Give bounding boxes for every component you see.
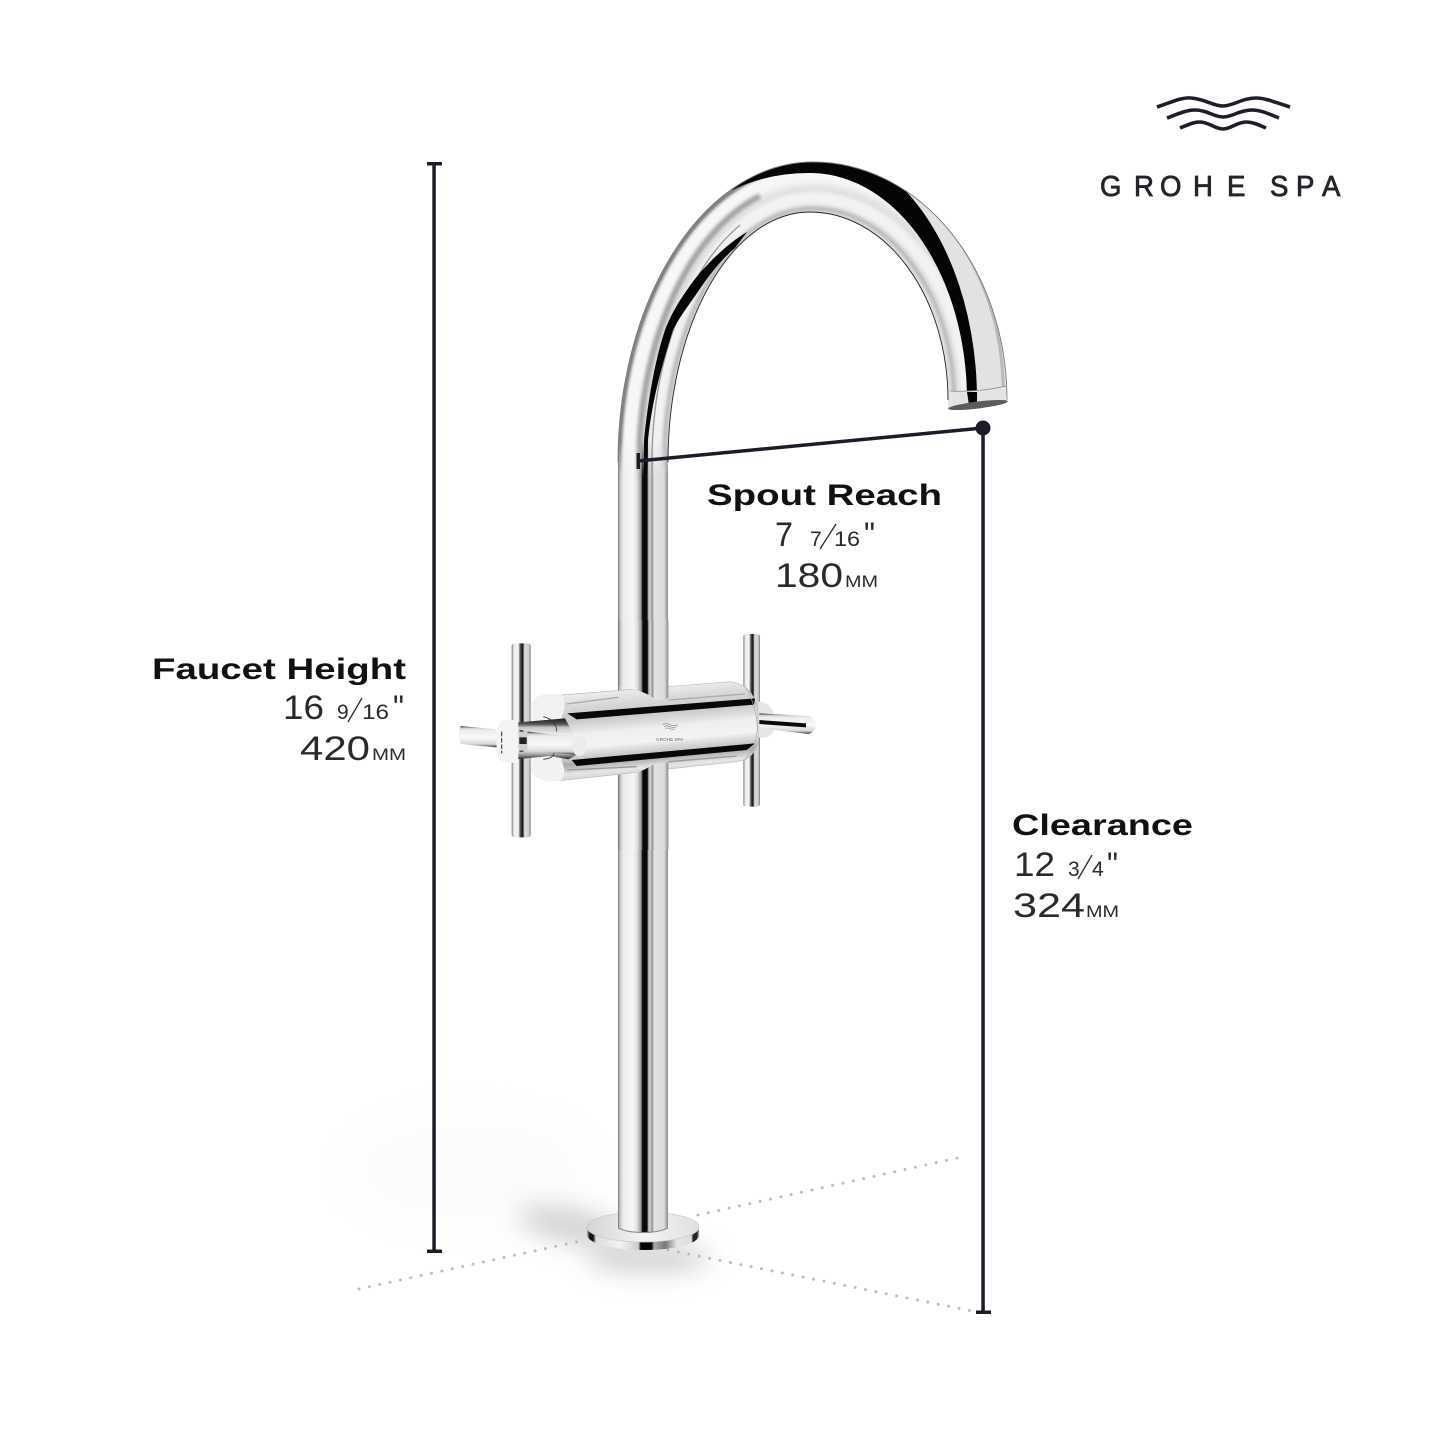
strip line (652, 225, 740, 482)
column collar seam (618, 639, 668, 642)
right vertical handle (743, 634, 760, 807)
body logo: GROHE SPA (656, 737, 684, 742)
label: spout reach: 7 (810, 528, 822, 551)
outer edge shade (618, 179, 762, 474)
label: clearance: 3 (1068, 858, 1080, 881)
label: spout reach: " (864, 516, 875, 554)
right horizontal handle (759, 713, 816, 734)
left body cap (531, 694, 564, 782)
spout outline (668, 212, 948, 462)
label: spout reach: Spout Reach (707, 479, 942, 512)
mixer body (560, 682, 758, 781)
logo: waves (1157, 98, 1290, 129)
label: clearance: Clearance (1012, 809, 1193, 842)
faucet base (587, 1200, 699, 1250)
shaft ring (543, 717, 557, 759)
body end ring (745, 687, 757, 760)
body logo (656, 724, 684, 742)
lower column (618, 770, 668, 1220)
lower hub shaft (515, 751, 577, 759)
logo: wordmark: GROHE SPA (1100, 169, 1341, 202)
tube highlight (622, 173, 906, 464)
shade next to band (639, 196, 760, 482)
label: clearance: " (1107, 846, 1118, 884)
body dark bands (567, 698, 755, 719)
left hub (496, 720, 518, 763)
right hub (758, 702, 773, 738)
upper column joint (618, 620, 668, 700)
label: faucet height: 16 (362, 701, 389, 724)
label: faucet height: " (393, 689, 404, 727)
left vertical handle (512, 643, 531, 837)
label: clearance: 4 (1092, 858, 1104, 881)
upper hub shaft (515, 718, 574, 735)
label: clearance (1012, 809, 1193, 925)
upper column (618, 478, 668, 695)
label: clearance: 12 (1014, 846, 1055, 884)
label: spout reach: MM (845, 572, 878, 591)
left horizontal handle (459, 726, 497, 747)
dotted floor lines (359, 1157, 977, 1312)
aerator tip (948, 386, 1007, 410)
hub neck (517, 732, 528, 751)
label: spout reach: 16 (834, 528, 860, 551)
label: faucet height: Faucet Height (152, 653, 406, 686)
column blend (618, 440, 668, 478)
label: clearance: MM (1086, 902, 1119, 921)
front knob (527, 732, 587, 756)
spout arc (618, 150, 1010, 482)
label: faucet height: 16 (283, 689, 324, 727)
right light strip (909, 194, 1006, 390)
label: spout reach: 180 (775, 557, 843, 595)
infographic canvas (154, 96, 1341, 1314)
floor shadow (350, 1120, 710, 1272)
spout reach and clearance measure lines (636, 420, 991, 1314)
hub neck dark (519, 737, 527, 744)
label: faucet height: MM (372, 745, 406, 764)
label: faucet height: 420 (300, 730, 370, 768)
label: spout reach: 7 (775, 516, 793, 554)
cross handles and body (459, 620, 816, 850)
inner dark reflection (644, 232, 747, 482)
top dark reflection (732, 150, 977, 400)
inner edge shade (664, 208, 954, 482)
label: clearance: 324 (1013, 887, 1085, 925)
faucet height measure line (427, 162, 442, 1253)
label: faucet height: 9 (337, 701, 349, 724)
label: spout reach (707, 479, 942, 595)
inner strip light (655, 198, 966, 482)
lower column joint (618, 763, 668, 850)
faucet (459, 150, 1010, 1250)
label: faucet height (152, 653, 406, 768)
